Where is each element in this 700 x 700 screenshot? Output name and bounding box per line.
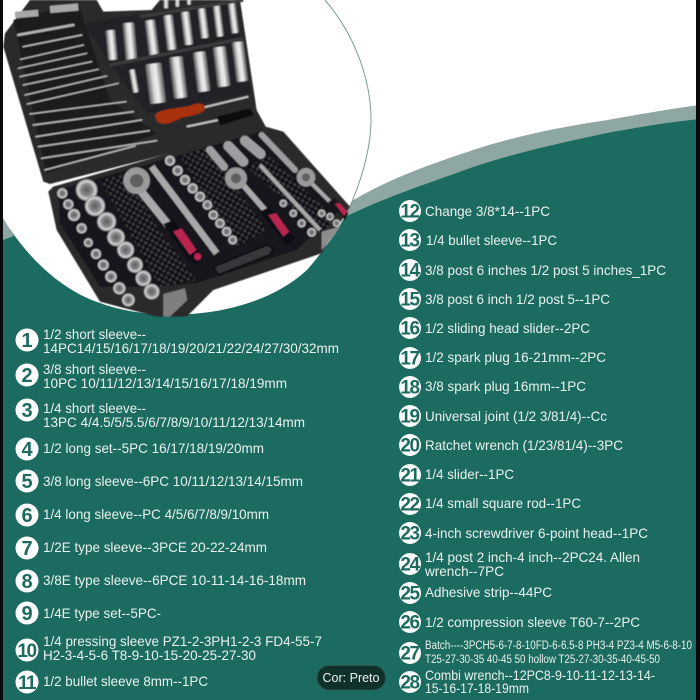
tool case photo illustration (3, 0, 350, 317)
item 2: 10PC 10/11/12/13/14/15/16/17/18/19mm (43, 375, 287, 391)
item 6: 1/4 long sleeve--PC 4/5/6/7/8/9/10mm (43, 506, 269, 522)
item 23: 4-inch screwdriver 6-point head--1PC (425, 525, 648, 541)
colour badge: Cor: Preto (323, 671, 380, 685)
item 3: 13PC 4/4.5/5/5.5/6/7/8/9/10/11/12/13/14mm (43, 414, 305, 430)
item 25: Adhesive strip--44PC (425, 584, 552, 600)
item 17: 17 (400, 348, 419, 370)
item 8: 3/8E type sleeve--6PCE 10-11-14-16-18mm (43, 572, 306, 588)
item 1 (16, 326, 339, 356)
item 24: 1/4 post 2 inch-4 inch--2PC24. Allen (425, 549, 640, 565)
item 5: 5 (21, 471, 33, 493)
item 28: 28 (400, 672, 419, 694)
item 27 (399, 640, 692, 666)
left sockets (57, 179, 160, 307)
item 4: 1/2 long set--5PC 16/17/18/19/20mm (43, 440, 264, 456)
circle outline (325, 0, 371, 213)
item 28 (399, 667, 655, 696)
item 3: 1/4 short sleeve-- (43, 400, 146, 416)
item 20 (399, 434, 623, 456)
ratchet 3 (297, 168, 348, 220)
item 10 (16, 633, 322, 663)
extension bar 2 (260, 165, 320, 230)
shelf lines in lid (110, 0, 243, 65)
item 5: 3/8 long sleeve--6PC 10/11/12/13/14/15mm (43, 473, 303, 489)
item 22: 22 (400, 494, 419, 516)
case tray (48, 126, 350, 317)
colour badge (317, 666, 386, 690)
item 5 (16, 470, 303, 493)
item 2 (16, 361, 287, 391)
item 17: 1/2 spark plug 16-21mm--2PC (425, 349, 606, 365)
item 7: 7 (21, 538, 33, 560)
item 4: 4 (21, 439, 33, 461)
ratchet 1 (123, 167, 203, 265)
item 12: 12 (400, 202, 419, 222)
item 4 (16, 438, 264, 461)
white area above swoosh (320, 0, 700, 205)
item 7 (16, 536, 267, 560)
item 19: 19 (400, 406, 419, 428)
item 2: 3/8 short sleeve-- (43, 361, 146, 377)
item 24: 24 (400, 554, 420, 576)
item 14 (399, 259, 666, 282)
lid socket compartment (83, 0, 252, 113)
item 21: 21 (400, 466, 420, 486)
left black edge (0, 0, 3, 700)
tray inner (58, 132, 340, 287)
item 22: 1/4 small square rod--1PC (425, 495, 581, 511)
item 13: 13 (400, 230, 419, 252)
right list (399, 200, 692, 696)
white circle behind tool case (0, 0, 371, 315)
top tray extensions (210, 135, 295, 170)
item 14: 3/8 post 6 inches 1/2 post 5 inches_1PC (425, 262, 666, 278)
item 6: 6 (21, 505, 33, 527)
item 12: Change 3/8*14--1PC (425, 203, 550, 219)
right black edge (696, 0, 700, 700)
item 24 (399, 549, 640, 579)
item 3: 3 (21, 400, 33, 422)
item 20: 20 (400, 436, 419, 456)
item 27: T25-27-30-35 40-45 50 hollow T25-27-30-35-40-45-50 (425, 654, 660, 666)
case handle (213, 245, 273, 275)
item 28: Combi wrench--12PC8-9-10-11-12-13-14- (425, 667, 655, 683)
item 11: 11 (18, 673, 37, 694)
item 16 (399, 317, 590, 340)
grey accent at left of circle (3, 218, 14, 240)
item 18: 3/8 spark plug 16mm--1PC (425, 378, 586, 394)
item 26: 26 (400, 612, 419, 634)
item 9: 9 (21, 603, 33, 625)
item 25: 25 (400, 584, 420, 604)
item 1: 1/2 short sleeve-- (43, 326, 146, 342)
item 19 (399, 405, 607, 428)
item 3 (16, 398, 305, 430)
item 6 (16, 504, 269, 527)
left list (16, 326, 339, 694)
item 13 (399, 229, 557, 252)
item 17 (399, 347, 606, 370)
item 26 (399, 611, 640, 634)
item 12 (399, 200, 550, 222)
item 18 (399, 376, 586, 398)
item 8: 8 (21, 571, 33, 593)
item 9: 1/4E type set--5PC- (43, 605, 161, 621)
item 9 (16, 602, 161, 625)
item 10: 1/4 pressing sleeve PZ1-2-3PH1-2-3 FD4-55-7 (43, 633, 322, 649)
item 21: 1/4 slider--1PC (425, 466, 514, 482)
item 21 (399, 464, 514, 486)
item 10: 10 (17, 641, 36, 662)
item 20: Ratchet wrench (1/23/81/4)--3PC (425, 437, 623, 453)
item 14: 14 (400, 260, 420, 282)
extension bar (152, 167, 217, 253)
item 19: Universal joint (1/2 3/81/4)--Cc (425, 408, 607, 424)
item 16: 1/2 sliding head slider--2PC (425, 320, 590, 336)
ratchet 2 (225, 167, 296, 247)
item 1: 1 (21, 330, 33, 352)
item 13: 1/4 bullet sleeve--1PC (426, 232, 557, 248)
item 28: 15-16-17-18-19mm (425, 680, 529, 696)
case lid (3, 0, 267, 184)
lid long sockets (105, 0, 248, 104)
item 11: 1/2 bullet sleeve 8mm--1PC (43, 673, 208, 689)
item 25 (399, 582, 552, 604)
item 22 (399, 493, 581, 516)
grey swoosh band (345, 105, 700, 217)
item 16: 16 (400, 318, 419, 340)
item 2: 2 (21, 365, 33, 387)
item 8 (16, 570, 306, 593)
item 23 (399, 522, 648, 544)
item 26: 1/2 compression sleeve T60-7--2PC (425, 614, 640, 630)
item 7: 1/2E type sleeve--3PCE 20-22-24mm (43, 539, 267, 555)
item 15 (399, 288, 610, 310)
item 23: 23 (400, 524, 419, 544)
item 1: 14PC14/15/16/17/18/19/20/21/22/24/27/30/32mm (43, 340, 339, 356)
bit fields (100, 173, 197, 287)
center sockets row (165, 155, 341, 245)
lid inner recess (13, 3, 157, 173)
item 15: 15 (400, 290, 420, 310)
item 15: 3/8 post 6 inch 1/2 post 5--1PC (425, 291, 610, 307)
item 18: 18 (400, 378, 419, 398)
case corner clips (163, 288, 187, 317)
item 27: 27 (400, 644, 419, 664)
item 24: wrench--7PC (424, 563, 504, 579)
wrench rows (18, 25, 157, 170)
item 10: H2-3-4-5-6 T8-9-10-15-20-25-27-30 (43, 647, 256, 663)
top-left fittings (15, 3, 79, 18)
screwdrivers (155, 97, 254, 127)
item 11 (16, 670, 208, 694)
